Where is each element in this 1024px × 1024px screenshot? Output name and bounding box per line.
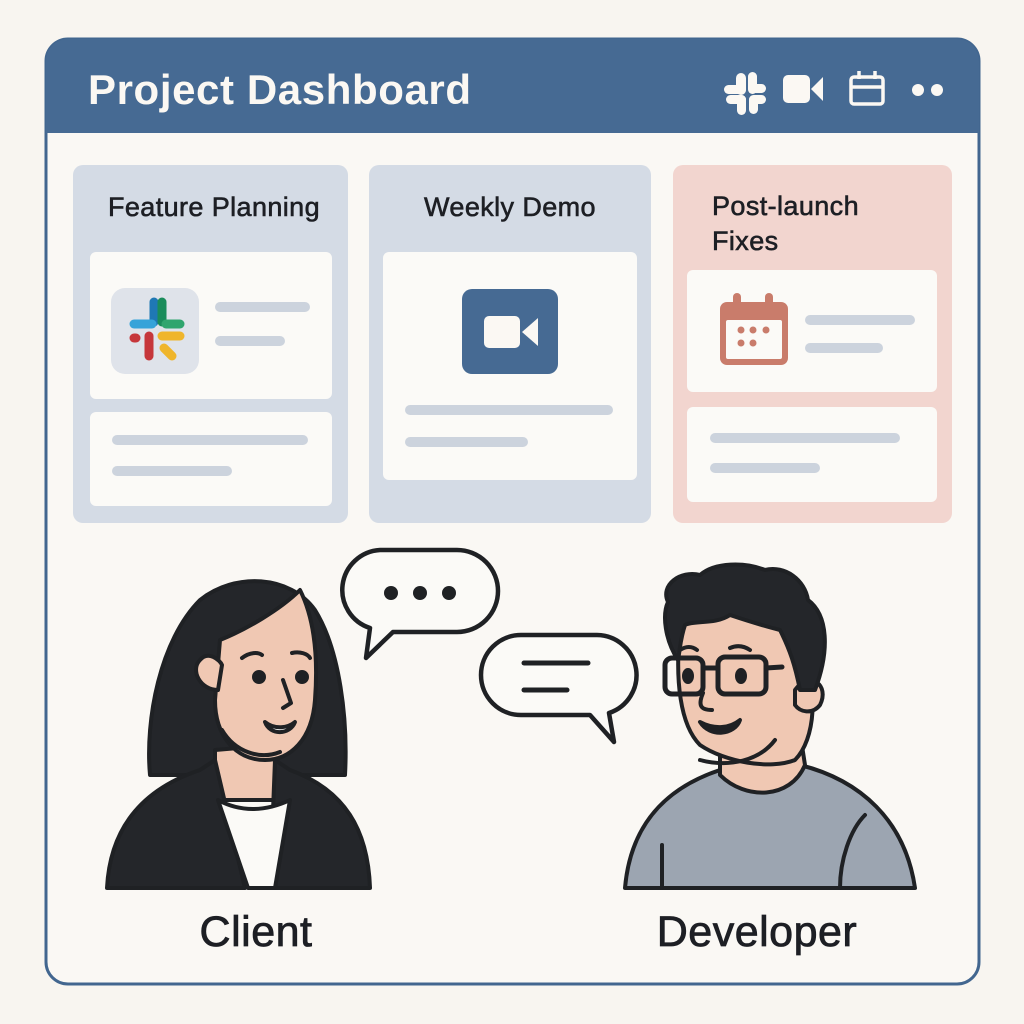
speech bubble: developer message <box>481 635 637 742</box>
panel: post-launch fixes: Fixes <box>712 226 779 256</box>
hair <box>665 565 825 690</box>
icon: more dots <box>912 84 943 96</box>
panel: weekly demo: Weekly Demo <box>424 192 596 222</box>
ear <box>196 656 222 690</box>
neck <box>720 720 805 793</box>
panel: feature planning <box>73 165 348 523</box>
header bar <box>46 39 979 133</box>
figure: client woman <box>107 581 370 888</box>
card: text <box>687 407 937 502</box>
icon: calendar header <box>851 71 883 104</box>
icon: calendar <box>720 293 788 365</box>
face <box>215 590 316 760</box>
speech bubble: client typing <box>342 550 498 658</box>
icon: slack logo <box>111 288 199 374</box>
icon: slack header <box>724 72 766 115</box>
ear <box>795 681 823 711</box>
icon: video call <box>462 289 558 374</box>
label: client: Client <box>200 908 312 956</box>
icon: video header <box>783 75 823 103</box>
card: text <box>90 412 332 506</box>
card: slack <box>90 252 332 399</box>
figure: developer man <box>625 565 915 888</box>
panel: post-launch fixes: Post-launch <box>712 191 859 221</box>
shirt <box>625 765 915 888</box>
neck <box>215 745 280 800</box>
panel: post-launch fixes <box>673 165 952 523</box>
label: developer: Developer <box>657 908 857 956</box>
jacket <box>107 760 245 888</box>
glasses <box>665 658 703 694</box>
card: calendar <box>687 270 937 392</box>
hair back <box>149 581 346 775</box>
title: Project Dashboard <box>88 66 472 113</box>
card: video <box>383 252 637 480</box>
panel: weekly demo <box>369 165 651 523</box>
panel: feature planning: Feature Planning <box>108 192 320 222</box>
face <box>678 614 813 764</box>
